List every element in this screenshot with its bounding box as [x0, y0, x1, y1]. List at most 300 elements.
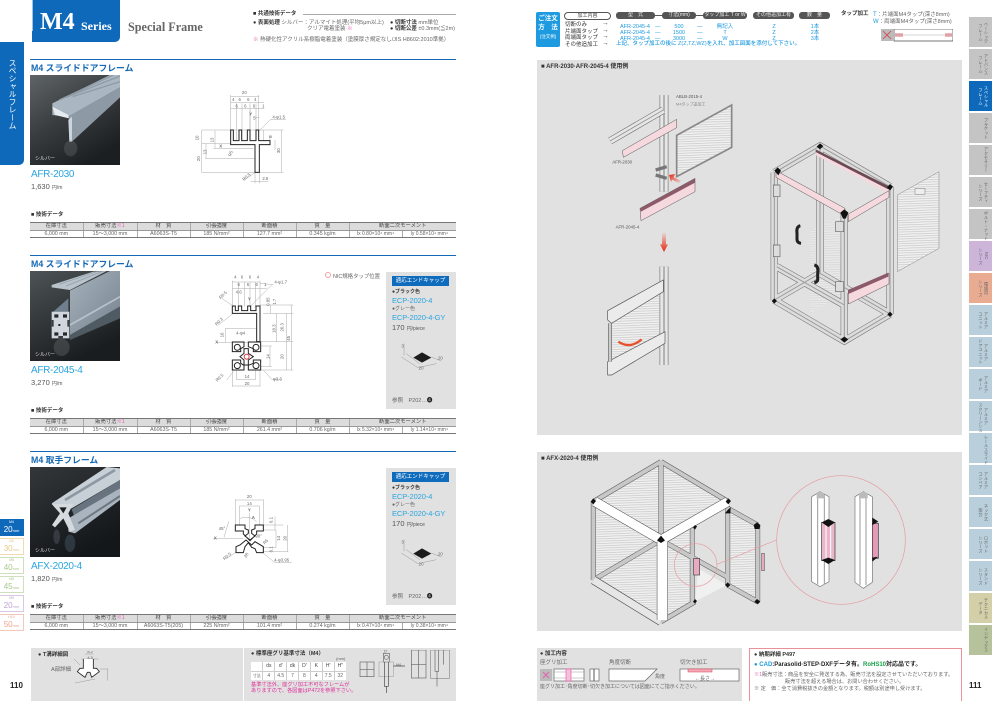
price: 3,270 円/m — [31, 378, 62, 387]
product name: AFR-2045-4 — [31, 365, 82, 376]
tab 15: アルミア コンベア — [978, 472, 989, 488]
tab 1: ベーシック フレーム — [978, 22, 989, 42]
cross-section drawing: 20 — [283, 535, 288, 541]
cross-section drawing: 6 — [249, 275, 252, 280]
counterbore drawing: M4 — [396, 663, 401, 667]
tab 16 — [969, 497, 992, 527]
cross-section drawing: 1 — [264, 282, 267, 287]
cross-section drawing: 20 — [247, 494, 252, 499]
tab 5 — [969, 145, 992, 175]
cross-section drawing: 6 — [255, 282, 258, 287]
counterbore note: 基準寸法外、座グリ加工不可なフレームが — [251, 682, 349, 688]
quantity column: 1本 — [811, 24, 819, 30]
A detail label: A部詳細 — [51, 667, 71, 673]
size column: 3000 — [673, 36, 685, 42]
size column: 1500 — [673, 30, 685, 36]
technical data table: 材 質 — [156, 223, 171, 229]
end cap label — [392, 276, 449, 286]
panel: delivery and CAD info — [749, 648, 962, 701]
usage heading: ■ AFR-2030·AFR-2045-4 使用例 — [541, 64, 628, 70]
tab 4 — [969, 113, 992, 143]
machining drawings — [537, 668, 742, 686]
header divider line — [32, 0, 33, 31]
technical data table: 在庫寸法 — [46, 223, 67, 229]
page reference: 参照 P202…❹ — [392, 594, 432, 600]
machining note: 座グリ加工･角度切断･切欠き加工については図面にてご指示ください。 — [540, 684, 700, 690]
pill connector — [696, 15, 703, 16]
part label: tap: ABLB-2015-4 — [676, 94, 703, 99]
cross-section drawing: 4-φ1.7 — [274, 279, 288, 284]
cross-section drawing: φ3.3 — [273, 377, 282, 382]
technical data table: A6063S-T5 — [150, 426, 177, 432]
cross-section drawing: 4.6 — [236, 289, 242, 294]
cross-section drawing: 18.3 — [271, 324, 276, 333]
gray colour label: ●グレー色 — [392, 306, 415, 312]
tab 9 — [969, 273, 992, 303]
technical data table: 15〜3,000 mm — [93, 230, 127, 236]
process rows: その他追加工 — [565, 42, 598, 48]
cross-section drawing: 28 — [243, 551, 250, 559]
tab 12: アルミア ボード — [978, 376, 989, 392]
cross-section drawing: X — [219, 144, 222, 149]
technical data table: 断面二次モーメント — [379, 615, 426, 621]
dash column 2: — — [697, 36, 702, 42]
cross-section drawing: 4-φ1.5 — [272, 115, 286, 120]
panel: AFR usage example — [537, 60, 962, 435]
product photo — [30, 75, 120, 165]
colour caption: シルバー — [35, 548, 55, 554]
cross-section drawing: 0.85 — [265, 297, 270, 306]
unit label: (mm) — [336, 656, 345, 661]
cross-section drawing: 4-φ4 — [236, 330, 246, 335]
product section: AFX-2020-4 — [30, 451, 456, 630]
technical data table: Ix 5.32×10⁴ mm⁴ — [357, 426, 394, 432]
technical data table: 断面積 — [262, 419, 277, 425]
assembled view — [608, 267, 665, 375]
technical data table: 引張強度 — [206, 223, 227, 229]
end cap drawing: 3 — [401, 344, 404, 349]
end cap label: 適応エンドキャップ — [396, 278, 445, 284]
tab 13 — [969, 401, 992, 431]
arrow: swing — [618, 339, 642, 345]
counterbore table: 寸法 — [253, 672, 261, 678]
technical data label: ■ 技術データ — [31, 212, 63, 218]
cross-section drawing: 14 — [247, 501, 252, 506]
process pill: 加工内容 — [577, 13, 598, 19]
technical data table: 販売寸法※1 — [95, 419, 125, 425]
panel: machining details — [537, 648, 742, 701]
tab M5 20mm — [0, 595, 24, 612]
technical data table: A6063S-T5 — [150, 230, 177, 236]
product photo — [30, 271, 120, 361]
counterbore table: H' — [326, 663, 330, 669]
tab 20: インデックス — [984, 627, 989, 653]
tap T: T：片端面M4タップ(深さ8mm) — [873, 12, 950, 18]
dash column: — — [655, 36, 660, 42]
cross-section drawing: Y — [248, 508, 251, 513]
technical data table: 15〜3,000 mm — [93, 622, 127, 628]
tab 17: ロボット シリーズ — [978, 536, 989, 552]
technical data table: 質 量 — [315, 419, 330, 425]
technical data table: Iy 0.58×10⁴ mm⁴ — [410, 230, 448, 236]
panel: T slot detail — [31, 648, 243, 701]
cross-section drawing: 45 — [286, 335, 291, 341]
dash column: — — [655, 30, 660, 36]
cross-section drawing: Y — [249, 112, 252, 117]
tap column — [717, 23, 733, 42]
ordering method block — [536, 12, 819, 48]
machining heading: ● 加工内容 — [540, 651, 567, 657]
technical data label: ■ 技術データ — [31, 604, 63, 610]
counterbore note: ありますので、各図面はP472を参照下さい。 — [251, 688, 356, 694]
product name: AFR-2030 — [31, 169, 74, 180]
counterbore note — [251, 681, 356, 694]
part label: AFR-2030: AFR-2030 — [612, 160, 633, 165]
cross-section drawing: R5 — [227, 149, 234, 157]
cross-section drawing: 2.5 — [262, 176, 269, 181]
model column — [620, 24, 650, 42]
tab 17 — [969, 529, 992, 559]
technical data table: 販売寸法※1 — [95, 223, 125, 229]
dash column: — — [655, 24, 660, 30]
model column: AFR-2045-4 — [620, 30, 650, 36]
technical data table: 101.4 mm² — [257, 622, 282, 628]
counterbore table: 7 — [291, 672, 294, 678]
product section: AFR-2045-4 — [30, 255, 456, 434]
gray part number: ECP-2020-4-GY — [392, 313, 445, 322]
arrow: insertion — [669, 174, 681, 183]
black part number: ECP-2020-4 — [392, 296, 432, 305]
sale size note: ※1販売寸法：商品を安全に発送する為、販売寸法を設定させていただいております。 — [754, 672, 953, 678]
section heading: M4 スライドドアフレーム — [31, 62, 133, 72]
other machining note: 上記、タップ加工の後に Z(Z,TZ,WZ)を入れ、加工図面を添付して下さい。 — [616, 41, 800, 47]
cross-section drawing: 20 — [196, 156, 201, 161]
cross-section drawing: R0.5 — [218, 290, 228, 300]
tap column: W — [722, 36, 728, 42]
CAD note: ● CAD:Parasolid·STEP·DXFデータ有。RoHS10対応品です。 — [754, 662, 921, 668]
technical data table — [30, 222, 456, 238]
model column: AFR-2045-4 — [620, 36, 650, 42]
tab 1 — [969, 17, 992, 47]
tab 10 — [969, 305, 992, 335]
series word: Series — [81, 19, 112, 33]
technical data table: 6,000 mm — [44, 426, 68, 432]
tab 11 — [969, 337, 992, 367]
tap column: T — [723, 30, 727, 36]
process arrows: → — [602, 40, 608, 47]
counterbore table: H" — [338, 663, 343, 669]
end cap price: 170 円/piece — [392, 323, 425, 332]
cross-section drawing: 6 — [253, 104, 256, 109]
clear coating: クリア電着塗装 ※ — [307, 26, 353, 32]
ordering label box — [536, 12, 560, 47]
cross-section drawing: Y — [248, 297, 251, 302]
dash column 2: — — [697, 24, 702, 30]
end cap drawing — [401, 344, 443, 370]
cross-section drawing: R0.3 — [214, 316, 224, 327]
end cap panel — [386, 272, 456, 409]
technical data table: 材 質 — [156, 615, 171, 621]
part label: tap machining: M4タップ追加工 — [676, 100, 706, 106]
tab M8 45mm — [0, 576, 24, 593]
side category tab: special frame — [0, 42, 24, 165]
pill quantity: 数 量 — [807, 12, 822, 18]
tab 18: スタンド シリーズ — [978, 568, 989, 584]
technical data table: 127.7 mm² — [257, 230, 282, 236]
cross-section drawing: X — [215, 340, 218, 345]
end cap drawing: 20 — [438, 552, 443, 557]
cross-section drawing: 20 — [279, 354, 284, 359]
technical data table: 0.706 kg/m — [309, 426, 336, 432]
counterbore table: K — [315, 663, 318, 669]
tab 20 — [969, 625, 992, 655]
technical data table — [30, 614, 456, 630]
tab H10 50mm: H10 — [8, 615, 15, 619]
page number 111: 111 — [969, 681, 981, 690]
part label: AFR-2045-4: AFR-2045-4 — [616, 225, 640, 230]
technical data table: 在庫寸法 — [46, 615, 67, 621]
side tab label: スペシャルフレーム — [8, 59, 17, 129]
quantity column: 3本 — [811, 36, 819, 42]
size column: 500 — [674, 24, 684, 30]
price: 1,630 円/m — [31, 182, 62, 191]
series header tab — [32, 0, 120, 42]
technical data table: 断面二次モーメント — [379, 223, 426, 229]
cross-section drawing: 6 — [247, 282, 250, 287]
process arrows: → — [602, 33, 608, 40]
technical data table: 261.4 mm² — [257, 426, 282, 432]
cross-section drawing: 6 — [241, 275, 244, 280]
tab M8 40mm — [0, 557, 24, 574]
cross-section drawing — [195, 90, 286, 184]
tab 3 active — [969, 81, 992, 111]
T slot drawing: 4.5 — [87, 655, 94, 660]
cross-section drawing: 6 — [237, 282, 240, 287]
end cap drawing: 20 — [438, 356, 443, 361]
cross-section drawing: 14 — [276, 535, 281, 541]
section heading: M4 スライドドアフレーム — [31, 258, 133, 268]
tab M5 20mm: 20mm — [4, 601, 19, 610]
tab 7 — [969, 209, 992, 239]
common technical data block — [253, 10, 456, 42]
tap position legend: NIC規格タップ位置 — [333, 274, 380, 280]
tab 8 — [969, 241, 992, 271]
end cap drawing — [401, 540, 443, 566]
sale size note line 2: 販売寸法を超える場合は、お問い合わせください。 — [785, 679, 904, 685]
technical data table: 引張強度 — [206, 615, 227, 621]
tab M6 30mm: M6 — [9, 539, 14, 543]
tab M4 20mm — [0, 519, 24, 536]
cross-section drawing: 14 — [265, 354, 270, 359]
cross-section drawing: 6.1 — [269, 516, 274, 523]
tab 19 — [969, 593, 992, 623]
price note: ※ 定 価：全て消費税抜きの金額となります。税額は別途申し受けます。 — [754, 686, 925, 692]
technical data table: A6063S-T5(205) — [144, 622, 183, 628]
ordering label box: 方 法 — [538, 24, 558, 31]
tab H10 50mm — [0, 614, 24, 631]
process rows — [565, 21, 598, 48]
cutting tolerance: ● 切断公差 ±0.3mm(≦2m) — [390, 26, 455, 32]
cross-section drawing: 4-φ3.95 — [274, 557, 290, 562]
technical data label: ■ 技術データ — [31, 408, 63, 414]
black part number: ECP-2020-4 — [392, 492, 432, 501]
process rows: 片端面タップ — [565, 29, 598, 35]
exploded view: door assembly — [610, 94, 732, 230]
tab 8: NIC シリーズ — [978, 248, 989, 264]
technical data table: 断面二次モーメント — [379, 419, 426, 425]
cross-section drawing: R0.5 — [222, 551, 233, 561]
pill tap: タップ加工 T or W — [704, 12, 746, 18]
tab 11: アルミア ドアユニット — [978, 339, 989, 365]
usage heading: ■ AFX-2020-4 使用例 — [541, 456, 598, 462]
tab M8 45mm: 45mm — [4, 582, 19, 591]
tab 16: ネック式 架台 — [978, 504, 989, 520]
callout circle small — [674, 544, 717, 586]
black colour label: ●ブラック色 — [392, 485, 420, 491]
panel: counterbore standard — [244, 648, 456, 701]
series title M4: M4 — [40, 9, 75, 35]
cross-section drawing: 45° — [219, 526, 226, 531]
cross-section drawing: 8 — [268, 135, 273, 138]
product photo — [30, 467, 120, 557]
product section: AFR-2030 — [30, 59, 456, 238]
left size selector tabs — [0, 519, 24, 631]
cross-section drawing: A — [252, 515, 256, 520]
tab 15 — [969, 465, 992, 495]
end cap label: 適応エンドキャップ — [396, 474, 445, 480]
pill model: 型 式 — [628, 12, 643, 18]
pill model — [616, 12, 655, 18]
right category tabs — [969, 17, 992, 655]
counterbore label: 座グリ加工 — [540, 660, 568, 666]
Z column: Z — [772, 24, 776, 30]
tab 18 — [969, 561, 992, 591]
order column header pills — [615, 0, 831, 20]
tab 6: セーフティ シリーズ — [978, 182, 989, 202]
technical data table: 225 N/mm² — [203, 622, 230, 628]
model column: AFR-2045-4 — [620, 24, 650, 30]
technical data table: 引張強度 — [206, 419, 227, 425]
pill other: その他追加工有 — [756, 12, 791, 18]
process rows: 両端面タップ — [565, 35, 598, 41]
cross-section drawing: 30 — [276, 148, 281, 153]
technical data table — [30, 418, 456, 434]
cross-section drawing: 6 — [247, 97, 250, 102]
tap processing legend — [841, 11, 956, 43]
tab M8 40mm: M8 — [9, 558, 14, 562]
technical data table: 185 N/mm² — [203, 230, 230, 236]
cross-section drawing: 5 — [253, 115, 256, 120]
cross-section drawing: 13 — [209, 137, 214, 142]
cross-section drawing: 4 — [234, 275, 237, 280]
tab 14: レールスライド — [984, 435, 989, 464]
size column — [673, 24, 685, 42]
section heading: M4 取手フレーム — [31, 454, 98, 464]
tap heading: タップ加工 — [841, 11, 869, 17]
technical data table: 断面積 — [262, 223, 277, 229]
tab M5 20mm: M5 — [9, 596, 14, 600]
tab 10: アルミア ユニット — [978, 312, 989, 328]
assembled cabinet with doors — [772, 143, 939, 343]
process rows: 切断のみ — [565, 22, 587, 28]
tab 3 active: スペシャル フレーム — [978, 86, 989, 106]
dash column 2 — [697, 24, 702, 42]
tab 7: ボルト・ナット — [984, 211, 989, 240]
tab 9: 環境用 シリーズ — [978, 280, 989, 296]
cross-section drawing: 4 — [257, 275, 260, 280]
end cap label — [392, 472, 449, 482]
delivery detail: ● 納期詳細 P497 — [754, 652, 795, 658]
closeup: post with centre handle — [812, 492, 835, 587]
end cap panel — [386, 468, 456, 605]
callout circle large — [777, 476, 905, 604]
tab H10 50mm: 50mm — [4, 620, 19, 629]
cross-section drawing: 6 — [235, 104, 238, 109]
gray part number: ECP-2020-4-GY — [392, 509, 445, 518]
tab 6 — [969, 177, 992, 207]
gray colour label: ●グレー色 — [392, 502, 415, 508]
black colour label: ●ブラック色 — [392, 289, 420, 295]
counterbore table: D' — [302, 663, 307, 669]
tab 5: アクセサリー — [984, 147, 989, 173]
technical data table: 15〜3,000 mm — [93, 426, 127, 432]
product name: AFX-2020-4 — [31, 561, 82, 572]
counterbore table: 4 — [315, 672, 318, 678]
pill quantity — [799, 12, 830, 18]
callout connector — [717, 540, 776, 564]
tap column: 無記入 — [717, 24, 733, 30]
T slot heading: ● T溝詳細図 — [38, 652, 68, 658]
technical data table: 6,000 mm — [44, 622, 68, 628]
counterbore table: 8 — [303, 672, 306, 678]
ordering label box: (注文例) — [540, 34, 556, 39]
tab 19: テクニカル データ — [978, 598, 989, 618]
coating note: ※ 熱硬化性アクリル系樹脂電着塗装（塗膜厚さ規定なし/JIS H8602:2010準拠） — [253, 36, 449, 42]
tap drawing — [881, 29, 953, 42]
tab 4: ブラケット — [984, 118, 989, 138]
quantity column: 2本 — [811, 30, 819, 36]
angle cut label: 角度切断 — [609, 660, 631, 666]
ordering label box: ご注文 — [538, 15, 558, 22]
cross-section drawing: 6 — [244, 104, 247, 109]
technical data table: Iy 1.14×10⁴ mm⁴ — [410, 426, 448, 432]
tab 12 — [969, 369, 992, 399]
dash column — [655, 24, 660, 42]
cross-section drawing: R0.5 — [241, 172, 252, 182]
cross-section drawing: 20 — [245, 381, 250, 386]
process arrows: → — [602, 20, 608, 27]
tab M6 30mm: 30mm — [4, 544, 19, 553]
cross-section drawing — [213, 494, 292, 563]
cross-section drawing: 1.7 — [272, 298, 277, 305]
cross-section drawing: 20 — [242, 90, 247, 95]
end cap drawing: 3 — [401, 540, 404, 545]
machining drawings: 角度 — [655, 673, 665, 680]
tab 2 — [969, 49, 992, 79]
counterbore table: 7.5 — [325, 672, 332, 678]
counterbore table: dk — [290, 663, 295, 669]
cutting size: ● 切断寸法 mm単位 — [390, 20, 439, 26]
machining drawings: ←長さ→ — [695, 675, 715, 682]
arrow: downward — [660, 232, 668, 252]
tab M4 20mm: 20mm — [4, 525, 19, 534]
cross-section drawing: 90° — [255, 533, 262, 538]
page reference: 参照 P202…❹ — [392, 398, 432, 404]
technical data table: Iy 0.38×10⁴ mm⁴ — [410, 622, 448, 628]
usage illustration — [537, 452, 962, 631]
colour caption: シルバー — [35, 352, 55, 358]
tab 2: アドバンス フレーム — [978, 54, 989, 74]
